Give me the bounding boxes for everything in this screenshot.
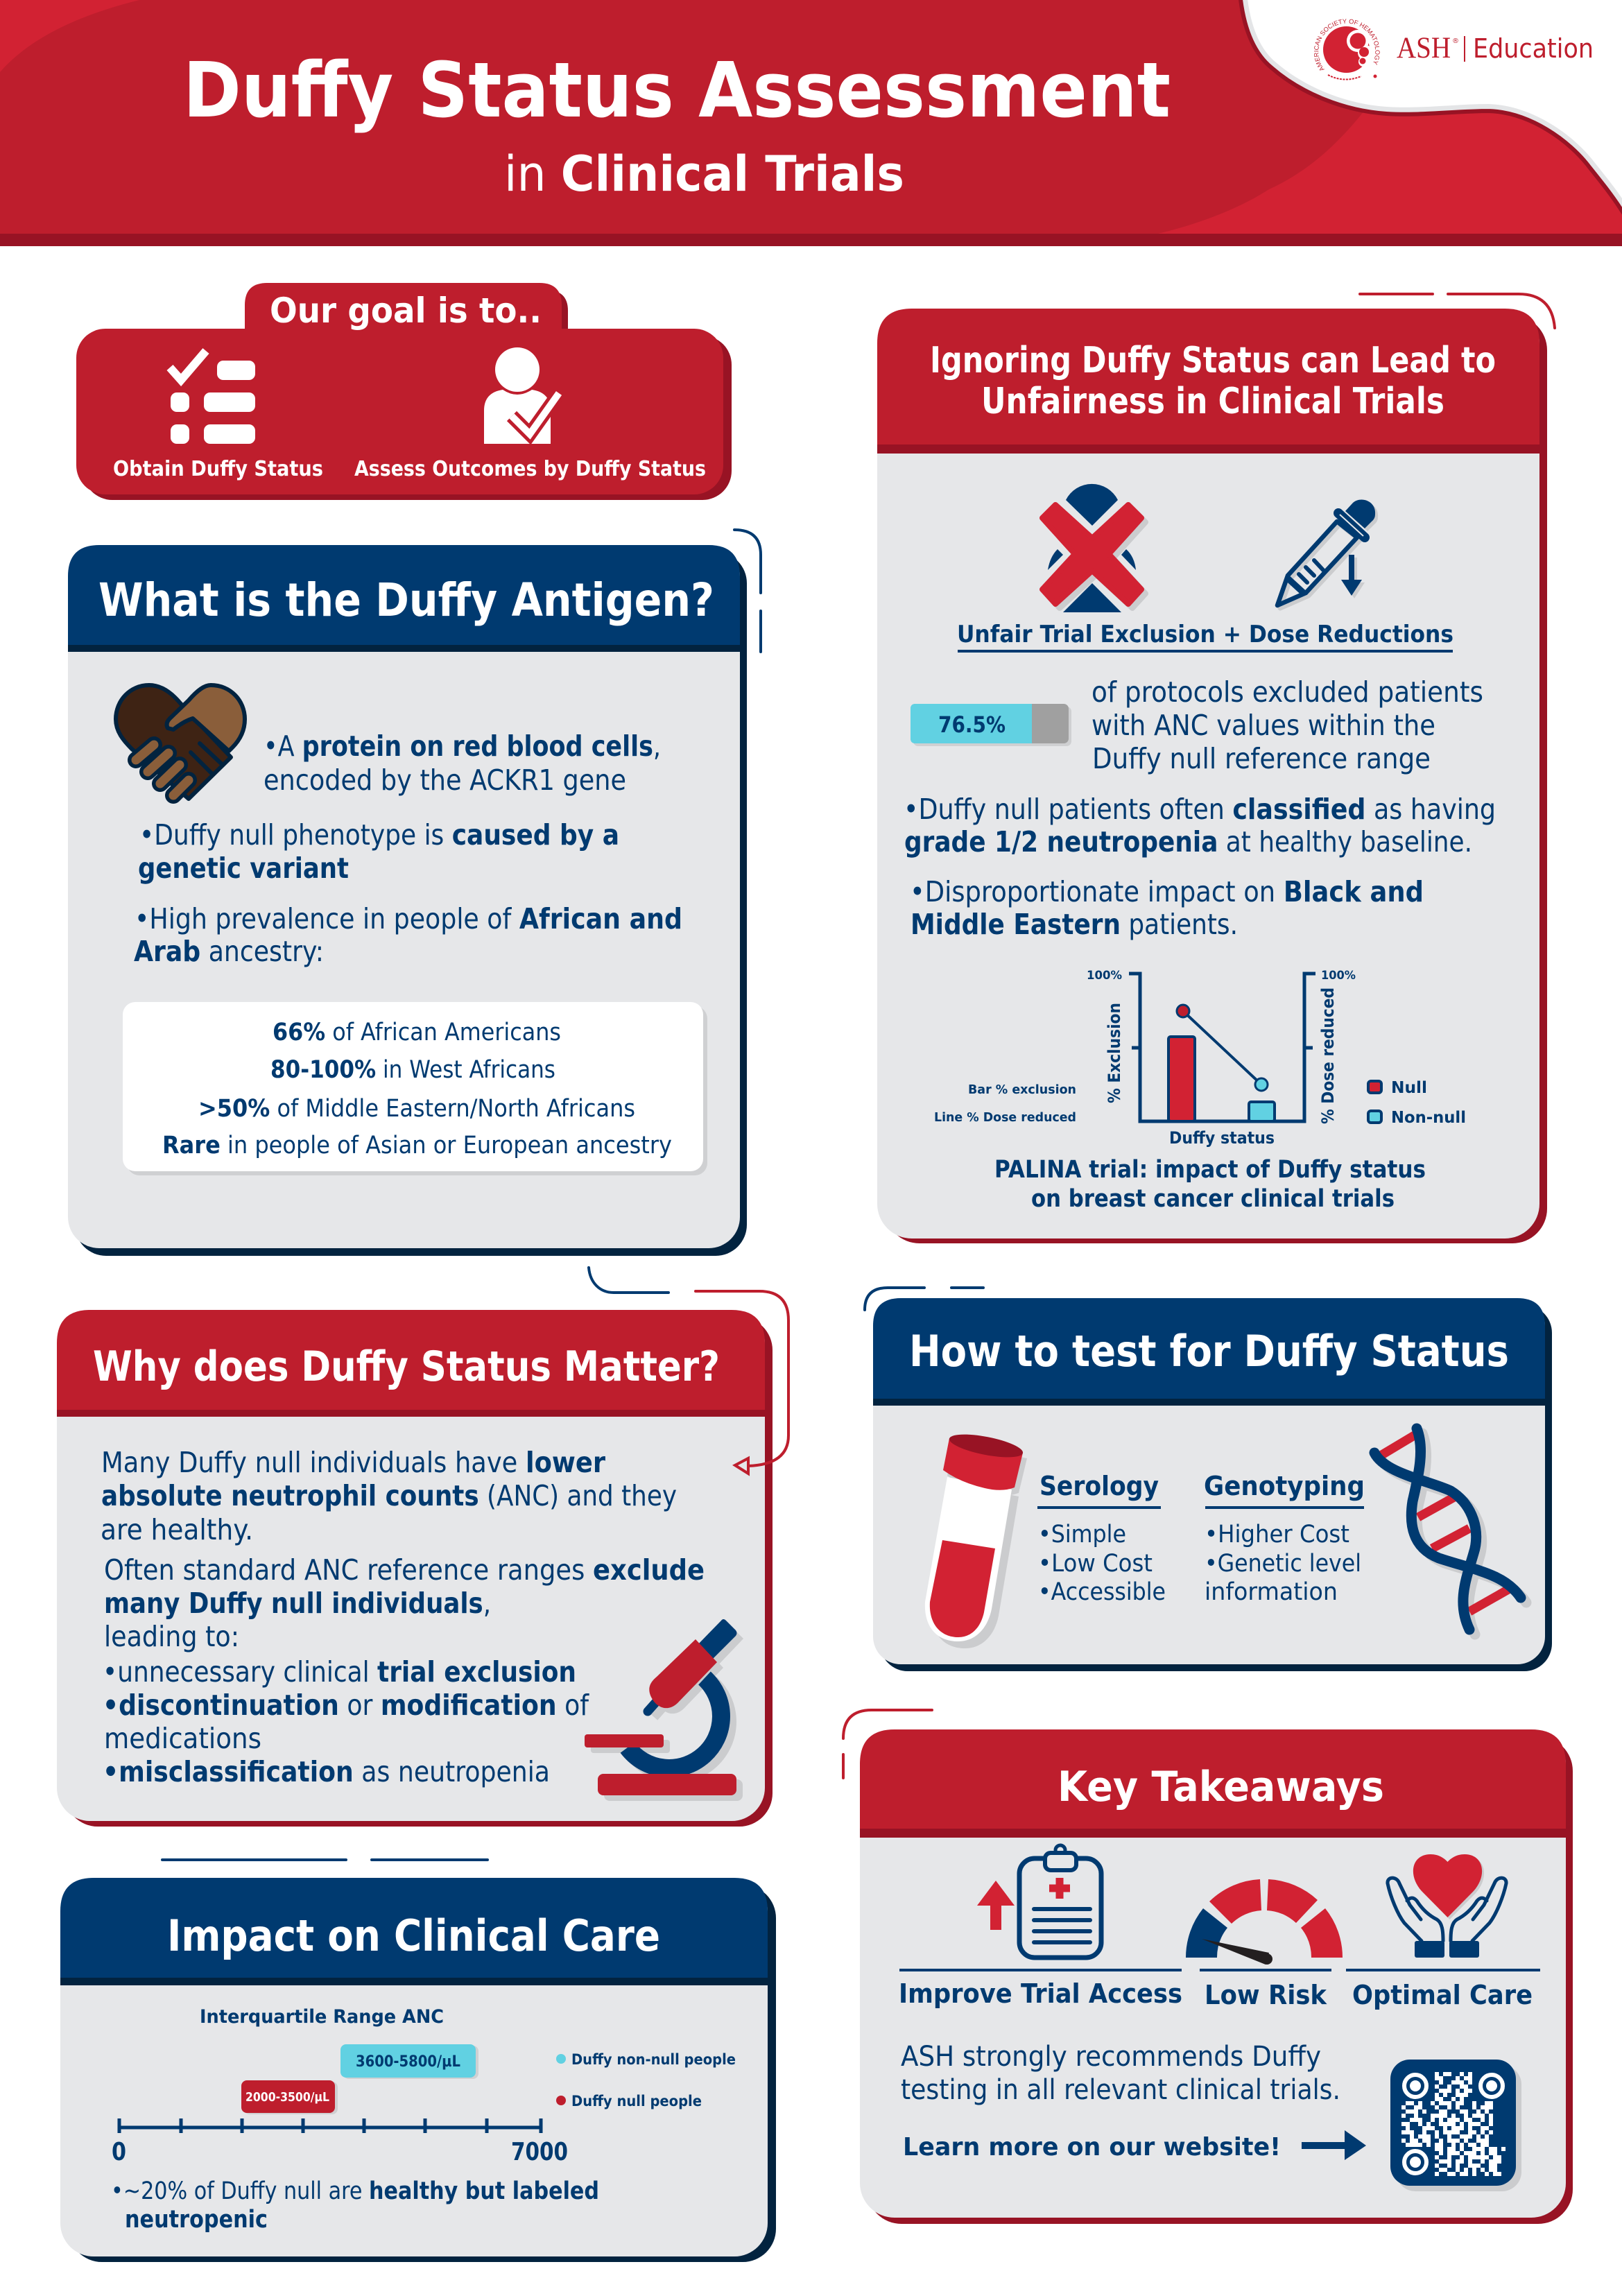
chart: PALINA trial: Bar % exclusion xyxy=(968,1082,1076,1097)
caption: PALINA trial: on breast cancer clinical trials xyxy=(1031,1185,1395,1213)
text: why body: •misclassification as neutropenia xyxy=(103,1755,550,1788)
chart: PALINA trial: Non-null xyxy=(1391,1109,1466,1127)
text: why body: leading to: xyxy=(104,1620,239,1653)
icon: blood tube xyxy=(925,1430,1027,1648)
panel: ignoring Duffy status xyxy=(877,309,1547,1243)
callout: prevalence figures: >50% of Middle Eastern/North Africans xyxy=(198,1095,635,1123)
text: disproportionate: Middle Eastern patients. xyxy=(911,908,1238,941)
logo: ASH Education: AMERICAN SOCIETY OF HEMATOLOGY xyxy=(1313,19,1380,71)
chart: 76.5% progress bar xyxy=(911,704,1071,746)
label: improve trial access: Improve Trial Access xyxy=(899,1978,1182,2009)
text: why body: absolute neutrophil counts (ANC) and they xyxy=(101,1479,677,1512)
icon: person crossed out xyxy=(1042,484,1146,612)
text: disproportionate xyxy=(910,875,1424,941)
heading: why does Duffy status matter: Why does Duffy Status Matter? xyxy=(93,1343,720,1391)
panel: impact on clinical care xyxy=(60,1878,776,2262)
text: protocols: with ANC values within the xyxy=(1092,709,1435,742)
logo: ASH Education: Education xyxy=(1473,33,1594,64)
legend: non-null: Duffy non-null people xyxy=(571,2051,736,2068)
legend: null: Duffy null people xyxy=(571,2093,702,2109)
logo: ASH Education: ASH xyxy=(1397,32,1451,64)
icon: DNA xyxy=(1374,1428,1526,1634)
chart: PALINA trial: % Exclusion xyxy=(1105,1003,1124,1103)
label: low risk: Low Risk xyxy=(1205,1980,1327,2010)
text: ASH recommends: testing in all relevant clinical trials. xyxy=(901,2074,1340,2106)
panel: why does Duffy status matter xyxy=(57,1310,773,1827)
callout: prevalence figures: Rare in people of Asian or European ancestry xyxy=(162,1132,672,1159)
icon: hands holding heart xyxy=(1388,1854,1506,1958)
callout: prevalence figures: 80-100% in West Africans xyxy=(270,1056,555,1084)
chart: PALINA trial: % Dose reduced xyxy=(1318,987,1338,1124)
chart: interquartile range ANC: 3600-5800/µL xyxy=(356,2053,460,2071)
text: classified xyxy=(904,793,1496,858)
text: neutropenic note: •~20% of Duffy null are healthy but labeled xyxy=(111,2177,599,2205)
label: assess: Assess Outcomes by Duffy Status xyxy=(354,457,706,481)
text: serology: •Simple xyxy=(1038,1521,1126,1548)
panel: what is the Duffy antigen xyxy=(68,545,747,1256)
heading: impact on clinical care: Impact on Clinical Care xyxy=(167,1910,660,1961)
text: ancestry: Arab ancestry: xyxy=(134,935,324,968)
heading: ignoring Duffy status xyxy=(930,340,1496,422)
title: in Clinical Trials xyxy=(504,146,904,202)
text: prevalence: •High prevalence in people of African and xyxy=(135,902,682,935)
text: why body: medications xyxy=(104,1722,261,1755)
text: genetic variant: genetic variant xyxy=(138,852,349,885)
text: disproportionate: •Disproportionate impact on Black and xyxy=(910,875,1424,908)
heading: unfair trial exclusion: Unfair Trial Exclusion + Dose Reductions xyxy=(957,621,1453,648)
callout: prevalence figures: 66% of African Americans xyxy=(273,1019,561,1046)
text: genotyping xyxy=(1204,1471,1365,1606)
chart: PALINA trial: 100% xyxy=(1321,969,1356,983)
chart: PALINA trial: Duffy status xyxy=(1169,1128,1275,1148)
chart: 76.5% progress bar: 76.5% xyxy=(938,711,1006,738)
text: classified: •Duffy null patients often classified as having xyxy=(904,793,1496,826)
arrow: to QR code xyxy=(1302,2130,1366,2160)
panel: key takeaways xyxy=(860,1729,1573,2224)
icon: clipboard with arrow xyxy=(977,1845,1101,1958)
text: genotyping: Genotyping xyxy=(1204,1471,1365,1501)
logo: ASH Education: ® xyxy=(1452,37,1459,45)
text: learn more: Learn more on our website! xyxy=(903,2133,1281,2161)
chart: interquartile range ANC: 7000 xyxy=(511,2138,568,2166)
icon: dropper xyxy=(1277,499,1378,608)
text: why body: many Duffy null individuals, xyxy=(104,1587,491,1620)
icon: checklist xyxy=(170,351,255,444)
text: ASH recommends xyxy=(901,2041,1340,2106)
header banner xyxy=(0,0,1622,246)
chart: interquartile range ANC xyxy=(112,2006,568,2166)
text: ASH recommends: ASH strongly recommends Duffy xyxy=(901,2041,1321,2073)
text: phenotype: •Duffy null phenotype is caused by a xyxy=(139,818,619,852)
icon: gauge xyxy=(1186,1879,1343,1965)
title xyxy=(183,46,1171,202)
panel: how to test xyxy=(873,1298,1552,1671)
text: protocols xyxy=(1092,675,1483,775)
chart: interquartile range ANC: 0 xyxy=(112,2138,126,2166)
icon: microscope xyxy=(585,1619,743,1801)
icon: QR code xyxy=(1390,2060,1521,2191)
heading: what is the Duffy antigen: What is the Duffy Antigen? xyxy=(98,573,714,627)
text: protocols: Duffy null reference range xyxy=(1092,742,1431,775)
chart: PALINA trial xyxy=(934,969,1466,1148)
text: neutropenic note xyxy=(111,2177,599,2234)
icon: person with check xyxy=(484,347,559,444)
heading: ignoring Duffy status: Ignoring Duffy Status can Lead to xyxy=(930,340,1496,381)
text: neutropenic note: neutropenic xyxy=(125,2206,268,2234)
arrow: connector from antigen to why panel xyxy=(589,1268,788,1474)
text: serology: •Accessible xyxy=(1038,1578,1166,1606)
icon: heart handshake xyxy=(116,685,245,799)
text: why body: Often standard ANC reference ranges exclude xyxy=(104,1553,705,1587)
chart: interquartile range ANC: 2000-3500/µL xyxy=(245,2090,329,2105)
text: why body xyxy=(101,1446,705,1788)
text: genotyping: •Higher Cost xyxy=(1205,1521,1349,1548)
text: protein: •A protein on red blood cells, xyxy=(264,730,661,763)
heading: how to test: How to test for Duffy Status xyxy=(909,1326,1509,1376)
heading: our goal: Our goal is to.. xyxy=(270,291,542,331)
text: genotyping: information xyxy=(1205,1578,1338,1606)
logo: ASH Education xyxy=(1313,19,1594,80)
text: serology: •Low Cost xyxy=(1038,1550,1153,1578)
text: why body: Many Duffy null individuals have lower xyxy=(101,1446,606,1479)
caption: PALINA trial xyxy=(994,1156,1426,1213)
heading: key takeaways: Key Takeaways xyxy=(1058,1763,1384,1811)
chart: PALINA trial: Null xyxy=(1391,1079,1427,1097)
chart: PALINA trial: Line % Dose reduced xyxy=(934,1110,1076,1125)
callout: prevalence figures xyxy=(123,1002,707,1175)
text: why body: are healthy. xyxy=(101,1513,253,1546)
label: optimal care: Optimal Care xyxy=(1352,1980,1533,2010)
text: serology xyxy=(1037,1471,1166,1606)
text: why body: •discontinuation or modification of xyxy=(103,1689,589,1722)
label: low risk xyxy=(1200,1969,1331,2010)
label: optimal care xyxy=(1346,1969,1540,2010)
label: obtain: Obtain Duffy Status xyxy=(113,457,323,481)
text: why body: •unnecessary clinical trial exclusion xyxy=(103,1655,576,1689)
chart: PALINA trial: 100% xyxy=(1087,969,1122,983)
title: Duffy Status Assessment xyxy=(183,46,1171,135)
caption: PALINA trial: PALINA trial: impact of Duffy status xyxy=(994,1156,1426,1184)
panel: our goal xyxy=(76,283,732,500)
text: classified: grade 1/2 neutropenia at healthy baseline. xyxy=(904,825,1472,858)
text: encoded: encoded by the ACKR1 gene xyxy=(264,763,626,797)
text: protocols: of protocols excluded patients xyxy=(1092,675,1483,709)
chart: interquartile range ANC: Interquartile Range ANC xyxy=(200,2006,444,2028)
text: serology: Serology xyxy=(1039,1471,1159,1501)
heading: ignoring Duffy status: Unfairness in Clinical Trials xyxy=(981,381,1444,422)
text: genotyping: •Genetic level xyxy=(1205,1550,1361,1578)
